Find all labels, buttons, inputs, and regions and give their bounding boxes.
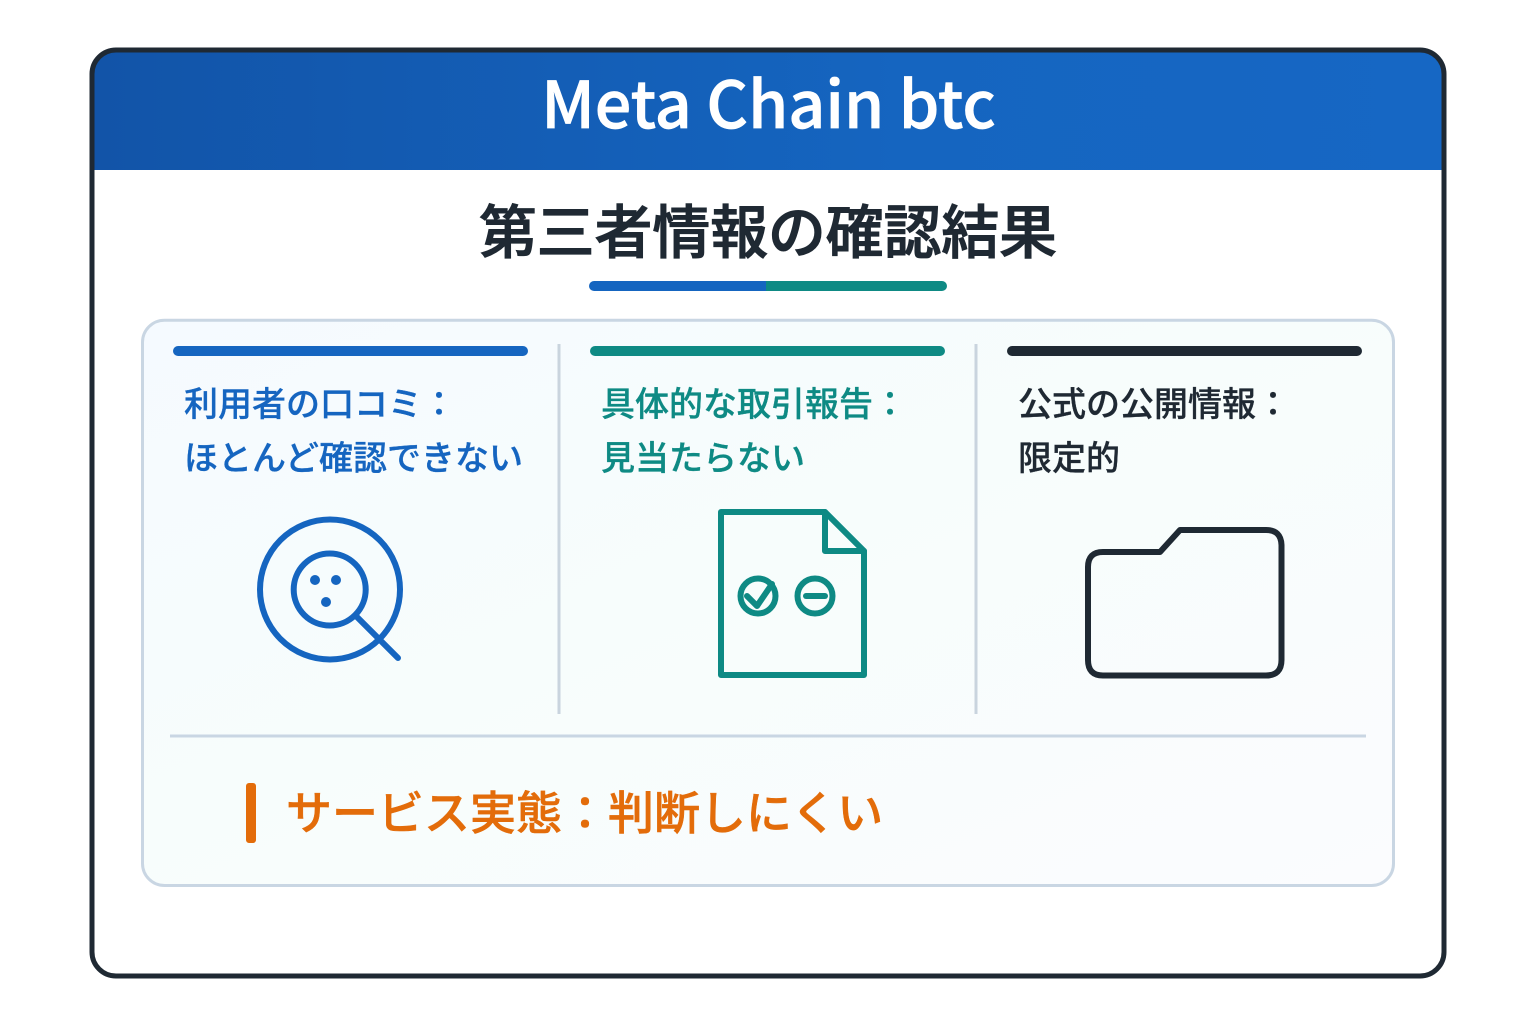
card border — [92, 50, 1444, 976]
column 1 text: 利用者の口コミ： — [184, 377, 456, 426]
conclusion accent bar — [246, 783, 256, 843]
column 3 accent bar — [1007, 346, 1362, 356]
subtitle underline — [589, 281, 947, 291]
conclusion text: サービス実態：判断しにくい — [286, 778, 883, 844]
header band — [92, 50, 1444, 170]
column 2 text: 具体的な取引報告： — [601, 377, 907, 426]
column 3 text: 公式の公開情報： — [1018, 377, 1290, 426]
column 2 text: 見当たらない — [601, 431, 805, 480]
horizontal divider — [170, 734, 1366, 738]
column 3: official disclosures — [1007, 346, 1362, 676]
panel: findings — [142, 320, 1394, 886]
card — [92, 50, 1444, 976]
column 3 text: 限定的 — [1018, 431, 1120, 480]
subtitle: 第三者情報の確認結果 — [479, 186, 1057, 270]
icon: folder — [1088, 530, 1282, 676]
icon: magnifier — [260, 520, 400, 660]
title: Meta Chain btc — [541, 53, 996, 147]
column 1: user reviews — [173, 346, 528, 660]
column 2: transaction reports — [590, 346, 945, 675]
icon: document — [721, 512, 864, 675]
column divider — [974, 344, 978, 714]
column 2 accent bar — [590, 346, 945, 356]
column 1 accent bar — [173, 346, 528, 356]
column divider — [558, 344, 560, 714]
conclusion — [246, 778, 883, 844]
column 1 text: ほとんど確認できない — [184, 431, 523, 480]
